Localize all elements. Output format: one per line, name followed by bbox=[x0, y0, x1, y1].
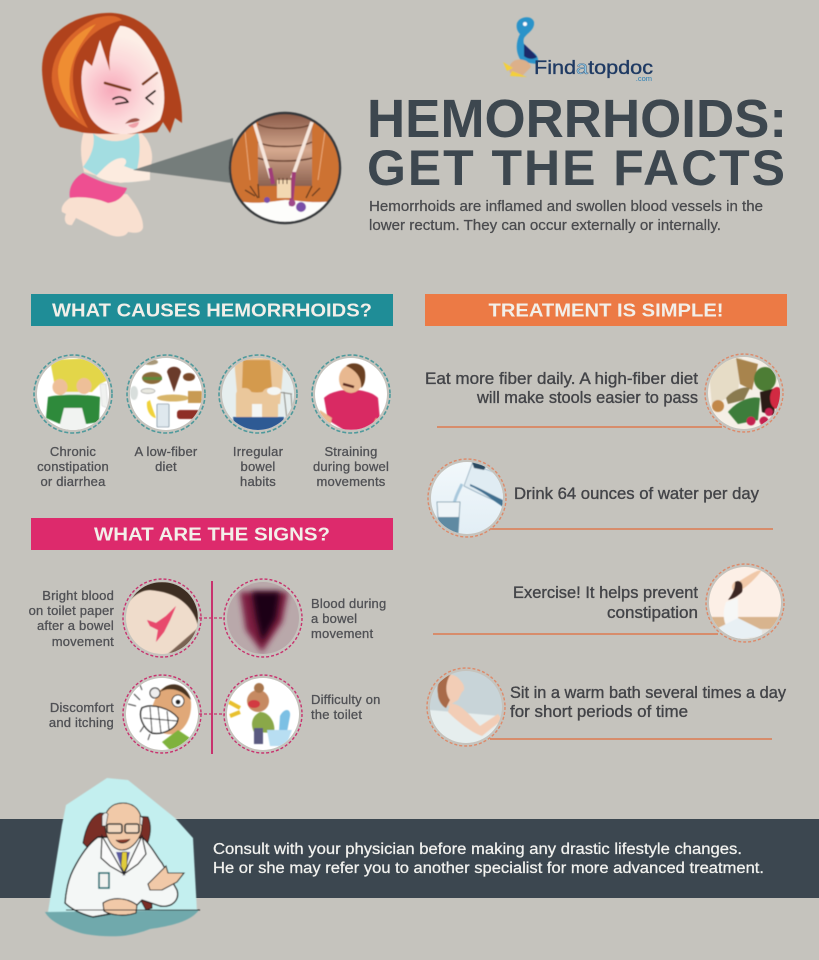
treatment: eat more fiber: will make stools easier to pass bbox=[476, 389, 698, 407]
panel: signs bbox=[29, 518, 393, 754]
sign: difficulty on the toilet: the toilet bbox=[311, 707, 362, 722]
treatment: warm bath bbox=[427, 668, 787, 746]
heading: what are the signs bbox=[31, 518, 393, 550]
cause: straining during bowel movements: movements bbox=[316, 474, 386, 489]
treatment: warm bath: for short periods of time bbox=[510, 703, 688, 721]
illustration: girl with stomach pain and magnified view bbox=[42, 13, 344, 236]
cause: chronic constipation or diarrhea: Chronic bbox=[50, 444, 96, 459]
cause: low-fiber diet: A low-fiber bbox=[135, 444, 198, 459]
sign: difficulty on the toilet: Difficulty on bbox=[311, 692, 381, 707]
intro text bbox=[369, 199, 763, 234]
sign: discomfort and itching: Discomfort bbox=[50, 700, 114, 715]
panel: causes bbox=[31, 294, 393, 489]
cause: irregular bowel habits: bowel bbox=[241, 459, 275, 474]
sign: bright blood on toilet paper bbox=[29, 579, 201, 657]
icon: hands bbox=[148, 866, 184, 890]
icon: hair bbox=[42, 13, 182, 134]
sign: blood during a bowel movement: Blood during bbox=[311, 596, 386, 611]
cause: chronic constipation or diarrhea: or diarrhea bbox=[40, 474, 106, 489]
title: GET THE FACTS bbox=[367, 140, 785, 196]
sign: bright blood on toilet paper: movement bbox=[52, 634, 114, 649]
sign: bright blood on toilet paper: after a bowel bbox=[37, 618, 114, 633]
treatment: exercise bbox=[433, 564, 785, 643]
logo: Findatopdoc: .com bbox=[636, 74, 652, 83]
heading: treatment is simple bbox=[425, 294, 787, 326]
title bbox=[367, 89, 787, 196]
icon: chair bbox=[83, 813, 152, 910]
icon: torso and arms bbox=[81, 132, 152, 183]
sign: blood during a bowel movement bbox=[224, 579, 386, 657]
cause: low-fiber diet bbox=[127, 355, 205, 474]
treatment: eat more fiber bbox=[425, 354, 784, 432]
cause: low-fiber diet: diet bbox=[155, 459, 177, 474]
icon: magnified anatomy bbox=[226, 112, 344, 224]
footer band: consult your physician: He or she may refer you to another specialist for more advanced treatment. bbox=[213, 860, 764, 877]
logo: Findatopdoc bbox=[503, 17, 653, 83]
footer band: consult your physician: Consult with your physician before making any drastic lifestyle changes. bbox=[213, 841, 742, 858]
cause: irregular bowel habits: habits bbox=[240, 474, 276, 489]
sign: discomfort and itching: and itching bbox=[49, 715, 114, 730]
treatment: warm bath: Sit in a warm bath several times a day bbox=[510, 684, 787, 702]
treatment: drink water: Drink 64 ounces of water per day bbox=[514, 485, 760, 503]
icon: shorts bbox=[70, 173, 127, 203]
sign: blood during a bowel movement: movement bbox=[311, 626, 373, 641]
cause: straining during bowel movements bbox=[312, 355, 390, 489]
cause: chronic constipation or diarrhea: constipation bbox=[37, 459, 109, 474]
icon: shirt bbox=[83, 132, 140, 182]
footer band: consult your physician bbox=[0, 819, 819, 898]
intro text: lower rectum. They can occur externally or internally. bbox=[369, 218, 721, 234]
icon: backdrop bbox=[48, 778, 197, 912]
heading: what causes hemorrhoids bbox=[31, 294, 393, 326]
panel: treatment bbox=[425, 294, 787, 746]
title: HEMORRHOIDS: bbox=[367, 89, 787, 149]
treatment: drink water bbox=[428, 459, 773, 537]
treatment: exercise: Exercise! It helps prevent bbox=[513, 584, 698, 602]
heading: what causes hemorrhoids: WHAT CAUSES HEMORRHOIDS? bbox=[52, 300, 372, 320]
cause: chronic constipation or diarrhea bbox=[34, 355, 112, 489]
treatment: exercise: constipation bbox=[607, 604, 698, 622]
sign: difficulty on the toilet bbox=[224, 675, 381, 753]
logo wordmark: Find atopdoc bbox=[534, 58, 653, 79]
icon: forearm and hand bbox=[96, 158, 150, 182]
intro text: Hemorrhoids are inflamed and swollen blood vessels in the bbox=[369, 199, 763, 215]
cause: irregular bowel habits bbox=[219, 355, 297, 489]
sign: blood during a bowel movement: a bowel bbox=[311, 611, 357, 626]
sign: discomfort and itching bbox=[49, 675, 201, 753]
sign: bright blood on toilet paper: on toilet paper bbox=[29, 603, 114, 618]
cause: irregular bowel habits: Irregular bbox=[233, 444, 284, 459]
icon: magnifier beam bbox=[133, 138, 233, 183]
heading: what are the signs: WHAT ARE THE SIGNS? bbox=[94, 524, 330, 544]
icon: desk bbox=[45, 910, 199, 936]
treatment: eat more fiber: Eat more fiber daily. A high-fiber diet bbox=[425, 370, 698, 388]
icon: coat bbox=[65, 837, 178, 917]
heading: treatment is simple: TREATMENT IS SIMPLE! bbox=[488, 300, 724, 320]
icon: duck mascot bbox=[503, 17, 538, 77]
icon: head and glasses bbox=[105, 803, 142, 850]
cause: straining during bowel movements: during bowel bbox=[313, 459, 389, 474]
timeline connector bbox=[199, 581, 225, 754]
icon: face bbox=[81, 26, 164, 134]
cause: straining during bowel movements: Straining bbox=[324, 444, 378, 459]
icon: legs bbox=[62, 194, 143, 236]
illustration: doctor at desk bbox=[45, 778, 200, 936]
sign: bright blood on toilet paper: Bright blood bbox=[42, 588, 114, 603]
